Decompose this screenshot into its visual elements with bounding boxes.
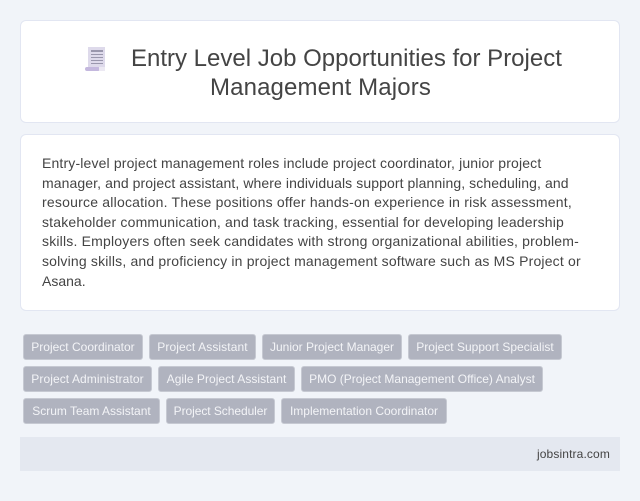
text block: description: manager, and project assistant, where individuals support planning, scheduling, and [42, 175, 569, 191]
tags: job titles: Project Assistant [157, 340, 248, 354]
heading: title line 1: Entry Level Job Opportunities for Project [131, 45, 562, 72]
tags: job titles: Project Support Specialist [416, 340, 554, 354]
tags: job titles: Agile Project Assistant [167, 372, 286, 386]
tags: job titles: Project Administrator [31, 372, 144, 386]
panel: description card [20, 134, 620, 311]
text block: description: stakeholder communication, and task tracking, essential for developing leadership [42, 214, 564, 230]
tags: job titles: Project Scheduler [174, 404, 267, 418]
text block: description: skills. Employers often seek candidates with strong organizational abilities, problem- [42, 233, 579, 249]
tags: job titles: Junior Project Manager [270, 340, 394, 354]
text block: description [42, 155, 581, 289]
tags: job titles: Scrum Team Assistant [32, 404, 151, 418]
footer bar [20, 437, 620, 471]
icon: document scroll [85, 47, 105, 71]
footer source text: jobsintra.com [537, 447, 610, 461]
tags: job titles: PMO (Project Management Office) Analyst [309, 372, 535, 386]
text block: description: Entry-level project management roles include project coordinator, junior project [42, 155, 541, 171]
text block: description: resource allocation. These positions offer hands-on experience in risk assessment, [42, 194, 572, 210]
tags: job titles [23, 334, 562, 424]
panel: header card [20, 20, 620, 123]
tags: job titles: Project Coordinator [31, 340, 135, 354]
heading: title line 2: Management Majors [210, 74, 431, 101]
text block: description: solving skills, and proficiency in project management software such as MS Project or [42, 253, 581, 269]
tags: job titles: Implementation Coordinator [290, 404, 438, 418]
text block: description: Asana. [42, 273, 86, 289]
